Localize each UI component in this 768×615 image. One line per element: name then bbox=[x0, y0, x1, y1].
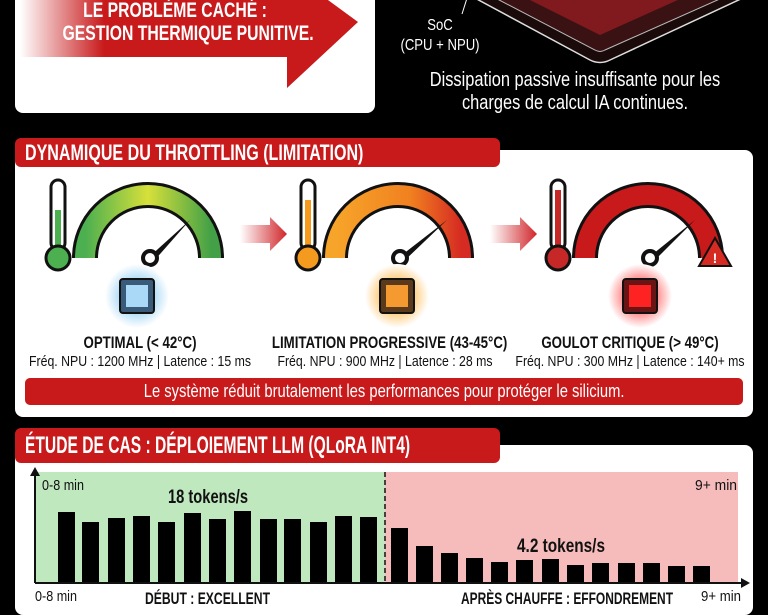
heading: case study bbox=[15, 428, 500, 463]
stage labels: GOULOT CRITIQUE (> 49°C) bbox=[541, 333, 719, 352]
bar chart: 4.2 tokens/s bbox=[517, 536, 605, 557]
stage labels: Fréq. NPU : 1200 MHz | Latence : 15 ms bbox=[29, 353, 251, 370]
bar chart: 0-8 min bbox=[35, 588, 77, 605]
dissipation text bbox=[430, 69, 720, 114]
bar chart: 0-8 min bbox=[42, 477, 84, 494]
red banner: Le système réduit brutalement les performances pour protéger le silicium. bbox=[144, 381, 624, 401]
stage 2 bbox=[296, 180, 461, 328]
chip diagram bbox=[462, 0, 740, 64]
panel: case study bbox=[15, 445, 753, 615]
stage labels: OPTIMAL (< 42°C) bbox=[83, 333, 197, 352]
soc label bbox=[400, 17, 480, 54]
stage 3: ! bbox=[713, 250, 717, 266]
dissipation text: charges de calcul IA continues. bbox=[462, 92, 688, 114]
stage labels: LIMITATION PROGRESSIVE (43-45°C) bbox=[272, 333, 507, 352]
heading: throttling bbox=[15, 138, 500, 167]
heading: case study: ÉTUDE DE CAS : DÉPLOIEMENT LLM (QLoRA INT4) bbox=[25, 432, 410, 459]
panel: throttling bbox=[15, 150, 753, 417]
stage 3 bbox=[546, 180, 731, 328]
bar chart: 9+ min bbox=[695, 477, 737, 494]
soc label: SoC bbox=[427, 17, 453, 34]
problem text: GESTION THERMIQUE PUNITIVE. bbox=[62, 22, 314, 45]
stage 1 bbox=[46, 180, 211, 328]
arrow 2 bbox=[490, 217, 537, 251]
panel: hidden problem bbox=[15, 0, 375, 113]
red arrow bbox=[23, 0, 358, 88]
bar chart bbox=[30, 467, 750, 605]
soc label: (CPU + NPU) bbox=[400, 37, 480, 54]
stage labels bbox=[29, 333, 745, 370]
red banner bbox=[25, 378, 743, 405]
heading: throttling: DYNAMIQUE DU THROTTLING (LIMITATION) bbox=[25, 140, 363, 165]
stage labels: Fréq. NPU : 300 MHz | Latence : 140+ ms bbox=[515, 353, 745, 370]
problem text bbox=[62, 0, 314, 45]
stage labels: Fréq. NPU : 900 MHz | Latence : 28 ms bbox=[277, 353, 493, 370]
bar chart: 9+ min bbox=[701, 588, 741, 605]
arrow 1 bbox=[240, 217, 287, 251]
bar chart: 18 tokens/s bbox=[168, 487, 248, 508]
dissipation text: Dissipation passive insuffisante pour les bbox=[430, 69, 720, 91]
